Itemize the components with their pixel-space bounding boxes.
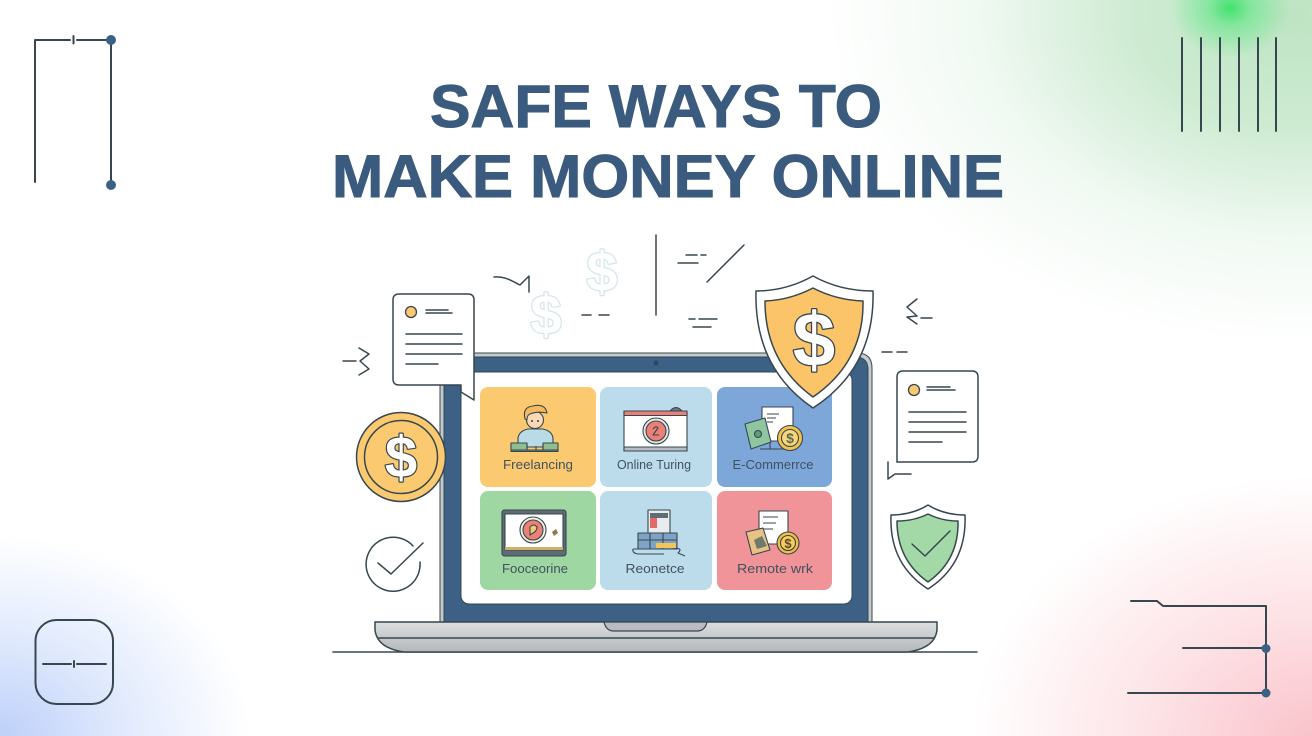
panel: e-commerce bbox=[717, 387, 832, 487]
icon: devices and cable bbox=[633, 510, 685, 556]
icon: tablet with badge bbox=[502, 510, 566, 556]
document: right note bbox=[888, 371, 978, 479]
icon: document, photo and coin: $ bbox=[784, 536, 792, 551]
icon: video window bbox=[624, 408, 687, 451]
icon: large dollar shield: $ bbox=[793, 298, 835, 383]
base seam bbox=[378, 637, 934, 639]
label: e-commerce: E-Commerrce bbox=[732, 457, 814, 472]
panel: online turing bbox=[600, 387, 712, 487]
laptop bezel bbox=[444, 357, 868, 622]
icon: check circle bbox=[366, 537, 423, 591]
panel: reonetce bbox=[600, 491, 712, 590]
label: reonetce: Reonetce bbox=[626, 561, 684, 576]
label: fooceorine: Fooceorine bbox=[502, 561, 568, 576]
title line 1: SAFE WAYS TO bbox=[430, 73, 882, 140]
webcam bbox=[654, 360, 658, 366]
panel: remote work bbox=[717, 491, 832, 590]
icon: gold coin: $ bbox=[385, 425, 417, 490]
laptop screen bbox=[461, 372, 852, 604]
laptop bbox=[375, 353, 937, 652]
icon: gold coin bbox=[356, 412, 446, 502]
panel: freelancing bbox=[480, 387, 596, 487]
label: freelancing: Freelancing bbox=[503, 457, 573, 472]
title line 2: MAKE MONEY ONLINE bbox=[332, 143, 1004, 210]
label: remote work: Remote wrk bbox=[737, 561, 814, 576]
icon: large dollar shield bbox=[756, 276, 873, 408]
panel: fooceorine bbox=[480, 491, 596, 590]
pale dollar: lower: $ bbox=[530, 283, 562, 346]
title bbox=[332, 73, 1004, 210]
icon: shop with cash and coin: $ bbox=[786, 430, 794, 446]
ground line bbox=[333, 651, 977, 653]
pale dollar: upper: $ bbox=[586, 240, 618, 303]
label: online turing: Online Turing bbox=[617, 457, 691, 472]
laptop lid bbox=[440, 353, 872, 622]
corner decoration: top right lines bbox=[1182, 38, 1276, 131]
corner decoration: bottom left bbox=[36, 620, 113, 704]
icon: green check shield bbox=[891, 505, 965, 589]
icon: freelancer bbox=[511, 405, 558, 452]
corner decoration: bottom right bbox=[1128, 601, 1270, 698]
pale dollar signs bbox=[530, 240, 618, 346]
floating accent strokes bbox=[343, 235, 932, 375]
trackpad notch bbox=[604, 622, 707, 631]
corner decoration: top left bbox=[35, 35, 116, 190]
document: left note bbox=[393, 294, 474, 400]
laptop base bbox=[375, 622, 937, 652]
